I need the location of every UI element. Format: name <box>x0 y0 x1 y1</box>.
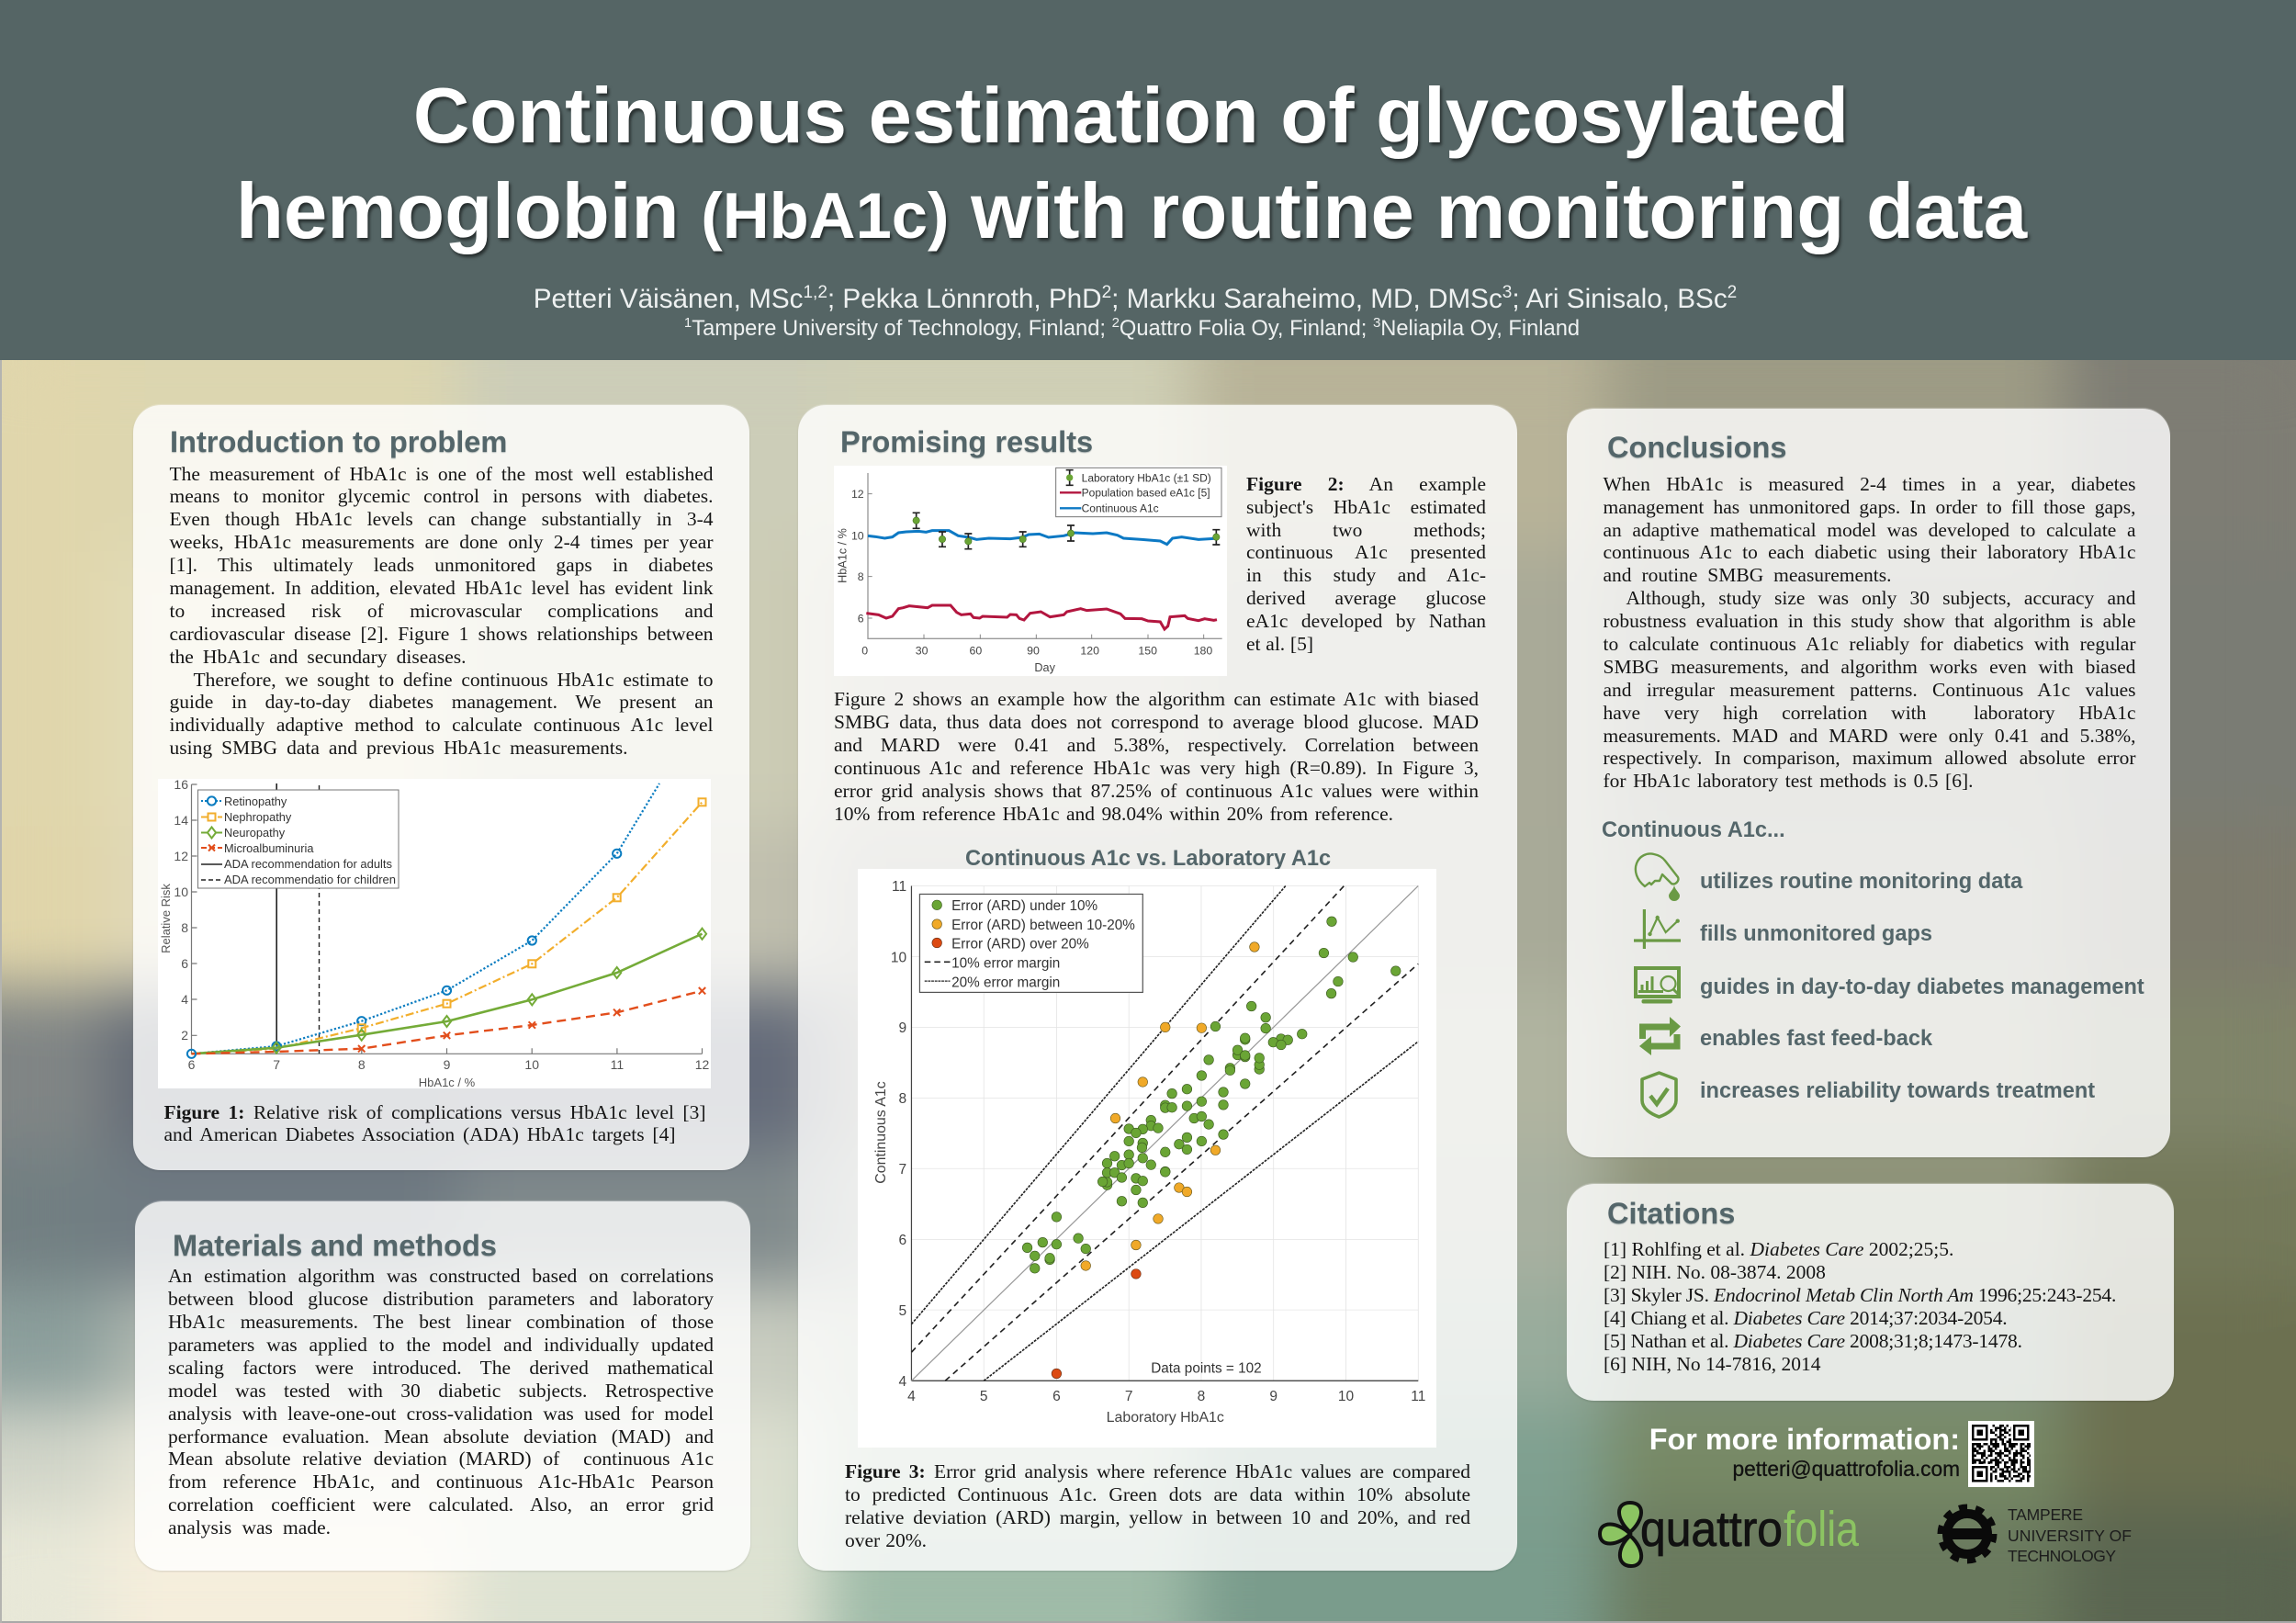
text: results body: continuous A1c and reference HbA1c was very high (R=0.89). In Figure 3, <box>834 757 1479 779</box>
chart: error grid scatter plot: Continuous A1c <box>873 1081 889 1184</box>
caption: figure 2: Figure 2: An example <box>1246 473 1486 495</box>
feature: day-to-day management: guides in day-to-day diabetes management <box>1700 975 2144 999</box>
text: methods body: parameters was applied to the model and individually updated <box>168 1334 714 1356</box>
text: introduction body: weeks, HbA1c measurements are done only 2-4 times per year <box>169 531 713 553</box>
heading: introduction: Introduction to problem <box>170 424 507 458</box>
feature: day-to-day management <box>1634 966 2144 1003</box>
feature: fast feed-back <box>1639 1017 1932 1055</box>
panel: citations <box>1567 1184 2174 1401</box>
chart: example subject HbA1c estimate: 60 <box>969 644 982 657</box>
text: conclusions body: Although, study size was only 30 subjects, accuracy and <box>1626 587 2136 609</box>
caption: figure 2: subject's HbA1c estimated <box>1246 496 1486 518</box>
heading: materials and methods: Materials and methods <box>173 1228 497 1262</box>
chart: error grid scatter plot: 11 <box>892 879 906 895</box>
text: conclusions body: measurements. MAD and MARD were only 0.41 and 5.38%, <box>1604 725 2136 747</box>
chart: example subject HbA1c estimate: 0 <box>861 644 868 657</box>
text: citation list: [1] Rohlfing et al. Diabetes Care 2002;25;5. <box>1604 1238 1953 1260</box>
chart: relative risk versus HbA1c <box>158 779 711 1088</box>
caption: figure 3: Figure 3: Error grid analysis where reference HbA1c values are compared <box>845 1460 1470 1482</box>
text: introduction body: cardiovascular disease [2]. Figure 1 shows relationships between <box>169 623 713 645</box>
chart: error grid scatter plot: 8 <box>899 1091 906 1107</box>
chart: example subject HbA1c estimate: 180 <box>1194 644 1212 657</box>
chart: relative risk versus HbA1c: Relative Risk <box>159 884 173 953</box>
contact email: petteri@quattrofolia.com <box>1732 1457 1960 1481</box>
chart: example subject HbA1c estimate: Laboratory HbA1c (±1 SD) <box>1082 471 1211 484</box>
feature: routine monitoring data: utilizes routine monitoring data <box>1700 870 2022 894</box>
heading: promising results: Promising results <box>840 424 1093 458</box>
heading: citations: Citations <box>1607 1196 1735 1230</box>
caption: figure 2: eA1c developed by Nathan <box>1246 610 1486 632</box>
heading: figure 3 title: Continuous A1c vs. Laboratory A1c <box>965 847 1331 871</box>
chart: example subject HbA1c estimate: 6 <box>858 612 864 625</box>
chart: error grid scatter plot: 6 <box>1052 1389 1061 1404</box>
text: methods body: correlation coefficient were calculated. Also, an error grid <box>168 1493 714 1516</box>
chart: example subject HbA1c estimate: 30 <box>916 644 929 657</box>
logo: Quattrofolia <box>1598 1501 1860 1568</box>
caption: figure 2 <box>1246 473 1486 655</box>
chart: error grid scatter plot: 4 <box>899 1374 907 1390</box>
chart: relative risk versus HbA1c: 7 <box>273 1057 280 1072</box>
caption: figure 3: to predicted Continuous A1c. Green dots are data within 10% absolute <box>845 1483 1470 1505</box>
chart: relative risk versus HbA1c: 12 <box>174 849 188 863</box>
text: results body: SMBG data, thus data does not correspond to average blood glucose. MAD <box>834 711 1479 733</box>
text: citation list: [2] NIH. No. 08-3874. 2008 <box>1604 1261 1826 1283</box>
panel: materials and methods <box>135 1201 750 1571</box>
text: methods body: analysis with leave-one-out cross-validation was used for model <box>168 1403 714 1425</box>
chart: error grid scatter plot: 9 <box>1269 1389 1277 1404</box>
caption: figure 2: with two methods; <box>1246 519 1486 541</box>
text: conclusions body: and irregular measurement patterns. Continuous A1c values <box>1604 679 2136 701</box>
chart: relative risk versus HbA1c: 14 <box>174 813 188 828</box>
text: methods body: HbA1c measurements. The best linear combination of those <box>168 1311 714 1333</box>
icon: shield with check <box>1640 1071 1678 1119</box>
caption: figure 2: continuous A1c presented <box>1246 541 1486 563</box>
text: results body <box>834 688 1479 825</box>
title line 2: hemoglobin (HbA1c) with routine monitoring data <box>236 168 2027 255</box>
panel: conclusions <box>1567 409 2170 1157</box>
chart: example subject HbA1c estimate: 12 <box>851 488 864 501</box>
text: results body: error grid analysis shows that 87.25% of continuous A1c values were within <box>834 780 1479 802</box>
text: introduction body: Even though HbA1c levels can change substantially in 3-4 <box>169 508 713 530</box>
chart: error grid scatter plot: 8 <box>1198 1389 1205 1404</box>
caption: figure 1 <box>163 1100 706 1145</box>
text: conclusions body: SMBG measurements, and algorithm works even with biased <box>1604 656 2136 678</box>
chart: error grid scatter plot: 11 <box>1411 1389 1425 1404</box>
panel: promising results <box>798 405 1517 1571</box>
text: conclusions body: When HbA1c is measured 2-4 times in a year, diabetes <box>1604 473 2136 495</box>
chart: error grid scatter plot: Laboratory HbA1c <box>1107 1410 1224 1426</box>
caption: figure 1: Figure 1: Relative risk of complications versus HbA1c level [3] <box>163 1100 706 1122</box>
text: methods body: model was tested with 30 diabetic subjects. Retrospective <box>168 1380 714 1402</box>
text: results body: Figure 2 shows an example how the algorithm can estimate A1c with biased <box>834 688 1479 710</box>
icon: line chart <box>1634 909 1681 949</box>
chart: relative risk versus HbA1c: 8 <box>181 920 188 935</box>
icon: finger with blood drop <box>1635 852 1680 901</box>
text: conclusions body <box>1604 473 2136 792</box>
text: introduction body: guide in day-to-day diabetes management. We present an <box>169 691 713 713</box>
title line 1: Continuous estimation of glycosylated <box>413 73 1849 160</box>
text: methods body: from reference HbA1c, and continuous A1c-HbA1c Pearson <box>168 1471 714 1493</box>
chart: error grid scatter plot: 9 <box>899 1020 906 1036</box>
text: introduction body: Therefore, we sought to define continuous HbA1c estimate to <box>193 669 713 691</box>
feature: unmonitored gaps: fills unmonitored gaps <box>1700 922 1932 946</box>
text: introduction body: individually adaptive method to calculate continuous A1c level <box>169 714 713 736</box>
chart: relative risk versus HbA1c: 10 <box>524 1057 539 1072</box>
text: methods body: between blood glucose distribution parameters and laboratory <box>168 1288 714 1310</box>
authors: Petteri Väisänen, MSc1,2; Pekka Lönnroth, PhD2; Markku Saraheimo, MD, DMSc3; Ari Sinisalo, BSc2 <box>534 283 1737 314</box>
chart: relative risk versus HbA1c: Neuropathy <box>224 826 286 840</box>
icon: loop arrows <box>1639 1017 1681 1055</box>
chart: example subject HbA1c estimate: Day <box>1034 661 1056 674</box>
chart: example subject HbA1c estimate: 10 <box>851 530 864 543</box>
text: conclusions body: for HbA1c laboratory test methods is 0.5 [6]. <box>1604 770 1973 792</box>
text: citation list: [4] Chiang et al. Diabetes Care 2014;37:2034-2054. <box>1604 1307 2007 1329</box>
text: methods body: An estimation algorithm was constructed based on correlations <box>168 1265 714 1287</box>
chart: error grid scatter plot: Data points = 102 <box>1151 1361 1262 1377</box>
caption: figure 2: in this study and A1c- <box>1246 564 1486 586</box>
chart: relative risk versus HbA1c: Nephropathy <box>224 810 292 824</box>
text: results body: 10% from reference HbA1c and 98.04% within 20% from reference. <box>834 803 1393 825</box>
caption: figure 2: et al. [5] <box>1246 633 1313 655</box>
chart: error grid scatter plot: Error (ARD) over 20% <box>951 937 1089 952</box>
caption: figure 3: relative deviation (ARD) margin, yellow in between 10 and 20%, and red <box>845 1506 1470 1528</box>
logo: Tampere University of Technology <box>1938 1505 2132 1565</box>
chart: relative risk versus HbA1c: 2 <box>181 1028 188 1043</box>
chart: error grid scatter plot: 4 <box>907 1389 916 1404</box>
chart: example subject HbA1c estimate: 150 <box>1138 644 1157 657</box>
text: introduction body: The measurement of HbA1c is one of the most well established <box>169 463 713 485</box>
feature: routine monitoring data <box>1635 852 2022 901</box>
panel: introduction to problem <box>133 405 749 1170</box>
background: blurred colour field <box>2 360 2296 1621</box>
chart: example subject HbA1c estimate: 120 <box>1080 644 1099 657</box>
chart: relative risk versus HbA1c: 9 <box>444 1057 451 1072</box>
contact: for more information <box>1649 1423 1960 1481</box>
text: citation list: [3] Skyler JS. Endocrinol Metab Clin North Am 1996;25:243-254. <box>1604 1284 2116 1306</box>
chart: error grid scatter plot: 10 <box>891 950 907 965</box>
chart: relative risk versus HbA1c: 11 <box>611 1057 624 1072</box>
chart: relative risk versus HbA1c: 12 <box>695 1057 709 1072</box>
chart: example subject HbA1c estimate: HbA1c / % <box>836 528 849 583</box>
chart: relative risk versus HbA1c: ADA recommendatio for children <box>224 873 396 886</box>
chart: error grid scatter plot: 7 <box>899 1162 906 1178</box>
chart: example subject HbA1c estimate <box>834 466 1227 676</box>
text: conclusions body: have very high correlation with laboratory HbA1c <box>1604 702 2136 724</box>
feature: fast feed-back: enables fast feed-back <box>1700 1027 1932 1051</box>
text: methods body <box>168 1265 714 1538</box>
feature: reliability <box>1640 1071 2095 1119</box>
chart: example subject HbA1c estimate: Continuous A1c <box>1082 502 1159 515</box>
chart: relative risk versus HbA1c: 8 <box>358 1057 366 1072</box>
affiliations: 1Tampere University of Technology, Finland; 2Quattro Folia Oy, Finland; 3Neliapila Oy, Finland <box>684 315 1580 341</box>
chart: relative risk versus HbA1c: 10 <box>174 885 188 899</box>
subheading: continuous A1c: Continuous A1c... <box>1602 818 1785 842</box>
logo: Quattrofolia: quattro <box>1640 1502 1783 1557</box>
chart: error grid scatter plot: 10 <box>1338 1389 1355 1404</box>
header band <box>0 0 2296 360</box>
text: conclusions body: management has unmonitored gaps. In order to fill those gaps, <box>1604 496 2136 518</box>
text: citation list: [6] NIH, No 14-7816, 2014 <box>1604 1353 1820 1375</box>
contact heading: For more information: <box>1649 1423 1960 1456</box>
caption: figure 3 <box>845 1460 1470 1551</box>
text: introduction body <box>169 463 713 759</box>
text: conclusions body: continuous A1c to each diabetic using their laboratory HbA1c <box>1604 541 2136 563</box>
feature: reliability: increases reliability towards treatment <box>1700 1079 2095 1103</box>
chart: example subject HbA1c estimate: 90 <box>1027 644 1040 657</box>
chart: error grid scatter plot: 5 <box>899 1303 906 1319</box>
caption: figure 3: over 20%. <box>845 1529 927 1551</box>
text: citation list <box>1604 1238 2116 1375</box>
chart: relative risk versus HbA1c: 6 <box>188 1057 196 1072</box>
text: methods body: performance evaluation. Mean absolute deviation (MAD) and <box>168 1426 714 1448</box>
text: conclusions body: and routine SMBG measurements. <box>1604 564 1892 586</box>
chart: error grid scatter plot: 5 <box>980 1389 988 1404</box>
chart: example subject HbA1c estimate: Population based eA1c [5] <box>1082 487 1210 500</box>
text: conclusions body: respectively. In comparison, maximum allowed absolute error <box>1604 747 2136 769</box>
text: citation list: [5] Nathan et al. Diabetes Care 2008;31;8;1473-1478. <box>1604 1330 2022 1352</box>
chart: relative risk versus HbA1c: 6 <box>181 956 188 971</box>
caption: figure 1: and American Diabetes Association (ADA) HbA1c targets [4] <box>163 1123 676 1145</box>
chart: relative risk versus HbA1c: Microalbuminuria <box>224 841 314 855</box>
text: introduction body: the HbA1c and secundary diseases. <box>169 646 467 668</box>
text: introduction body: using SMBG data and previous HbA1c measurements. <box>169 737 628 759</box>
chart: error grid scatter plot: 10% error margin <box>951 955 1060 971</box>
QR code <box>1968 1421 2034 1487</box>
text: introduction body: management. In addition, elevated HbA1c level has evident link <box>169 577 713 599</box>
text: introduction body: [1]. This ultimately leads unmonitored gaps in diabetes <box>169 554 713 576</box>
logo: Tampere University of Technology: TECHNOLOGY <box>2008 1547 2116 1565</box>
text: methods body: analysis was made. <box>168 1516 331 1538</box>
logo: Tampere University of Technology: TAMPERE <box>2008 1505 2083 1524</box>
logo: Tampere University of Technology: UNIVERSITY OF <box>2008 1527 2132 1545</box>
text: results body: and MARD were 0.41 and 5.38%, respectively. Correlation between <box>834 734 1479 756</box>
caption: figure 2: derived average glucose <box>1246 587 1486 609</box>
text: conclusions body: an adaptive mathematical model was developed to calculate a <box>1604 519 2136 541</box>
text: introduction body: to increased risk of microvascular complications and <box>169 600 713 622</box>
feature: unmonitored gaps <box>1634 909 1932 949</box>
icon: monitor with magnifier <box>1634 966 1681 1003</box>
text: conclusions body: to calculate continuous A1c reliably for diabetics with regular <box>1604 633 2136 655</box>
chart: relative risk versus HbA1c: 4 <box>181 992 188 1007</box>
text: introduction body: means to monitor glycemic control in persons with diabetes. <box>169 485 713 507</box>
chart: example subject HbA1c estimate: 8 <box>858 570 864 583</box>
chart: error grid scatter plot: Error (ARD) under 10% <box>951 898 1097 914</box>
text: conclusions body: robustness evaluation in this study show that algorithm is able <box>1604 610 2136 632</box>
feature list <box>1634 852 2144 1119</box>
chart: error grid scatter plot: 7 <box>1125 1389 1132 1404</box>
chart: error grid scatter plot <box>858 869 1436 1448</box>
chart: relative risk versus HbA1c: Retinopathy <box>224 795 287 808</box>
text: methods body: scaling factors were introduced. The derived mathematical <box>168 1357 714 1379</box>
heading: conclusions: Conclusions <box>1607 430 1787 464</box>
chart: error grid scatter plot: 20% error margin <box>951 975 1060 990</box>
chart: relative risk versus HbA1c: ADA recommendation for adults <box>224 857 392 871</box>
chart: error grid scatter plot: 6 <box>899 1233 906 1248</box>
text: methods body: Mean absolute relative deviation (MARD) of continuous A1c <box>168 1448 714 1470</box>
chart: error grid scatter plot: Error (ARD) between 10-20% <box>951 918 1135 933</box>
